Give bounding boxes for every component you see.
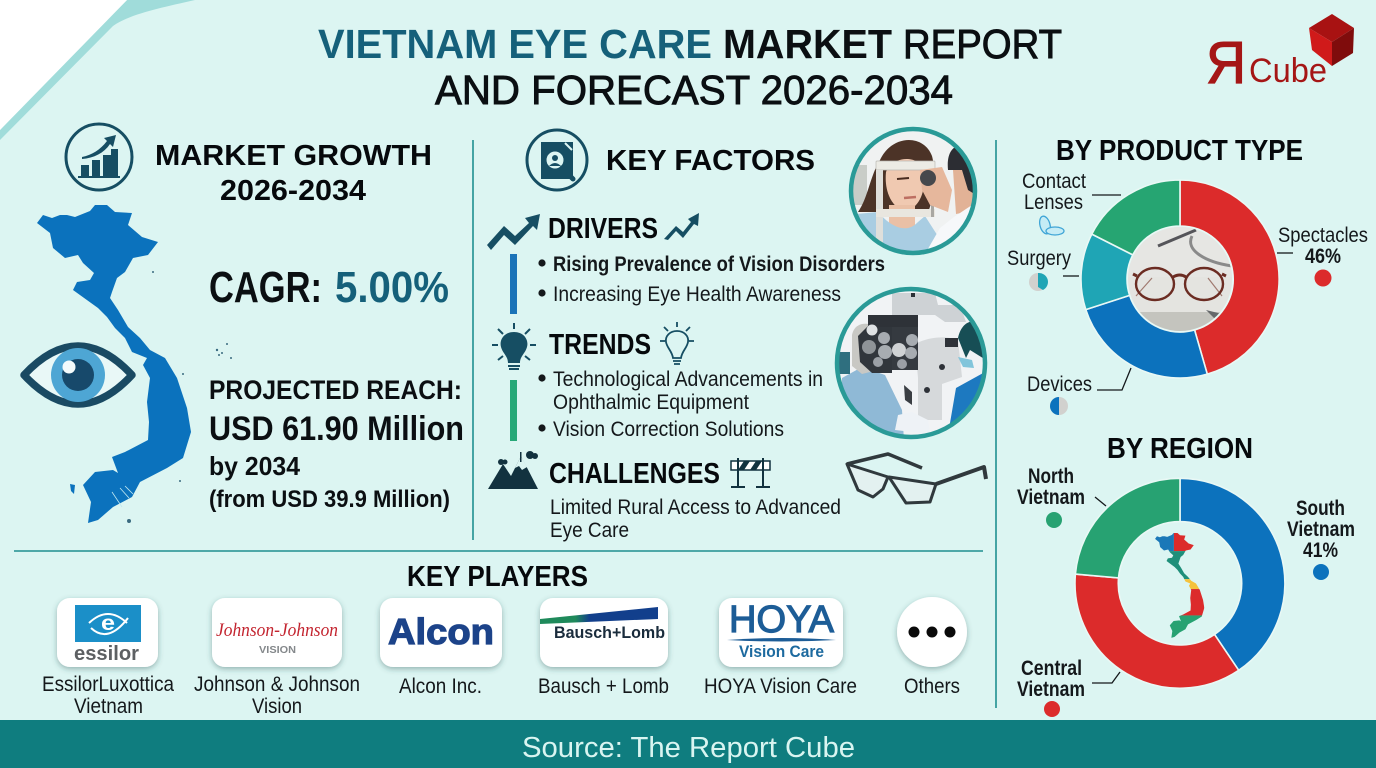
map of Vietnam — [37, 205, 232, 523]
icon: small rising arrow — [664, 213, 699, 240]
heading: market growth: 2026-2034 — [220, 175, 366, 207]
player: HOYA: Vision Care — [739, 642, 824, 661]
player: HOYA: HOYA — [729, 599, 835, 641]
title: REPORT — [903, 21, 1062, 67]
label: contact lenses: Lenses — [1024, 191, 1083, 214]
trends list: Technological Advancements in — [553, 368, 823, 391]
player: Johnson & Johnson — [194, 598, 360, 718]
challenges text — [550, 496, 841, 542]
player: Johnson & Johnson: VISION — [259, 644, 296, 656]
heading: key factors: KEY FACTORS — [606, 145, 815, 177]
player: Alcon: Alcon Inc. — [399, 675, 482, 698]
player: Johnson & Johnson: Johnson-Johnson — [216, 620, 338, 641]
icon: mountains — [488, 451, 538, 489]
CAGR — [209, 263, 449, 312]
drivers list: Increasing Eye Health Awareness — [553, 283, 841, 306]
label: central vietnam — [1017, 657, 1120, 717]
icon: barrier — [731, 458, 770, 487]
player: Alcon: Alcon — [388, 611, 494, 652]
player: others — [897, 597, 967, 698]
icon: eye — [24, 346, 132, 404]
player: Bausch + Lomb: Bausch+Lomb — [554, 623, 665, 642]
player: Bausch + Lomb — [538, 598, 669, 698]
panel: by region — [1017, 433, 1355, 717]
projected reach: USD 61.90 Million — [209, 410, 464, 448]
footer — [0, 720, 1376, 768]
label: devices — [1027, 368, 1131, 415]
icon: rising arrow — [487, 214, 540, 250]
photo: eye exam — [850, 129, 980, 258]
challenges section — [488, 451, 986, 542]
logo: RCube: Я — [1206, 30, 1246, 96]
label: contact lenses — [1022, 170, 1121, 235]
panel: key factors — [487, 129, 987, 542]
corner decoration — [0, 0, 195, 140]
label: central vietnam: Central — [1021, 657, 1082, 680]
heading: market growth: MARKET GROWTH — [155, 140, 432, 172]
drivers list — [538, 253, 885, 306]
title: VIETNAM EYE CARE — [318, 21, 712, 67]
title — [318, 21, 1062, 113]
label: south vietnam — [1287, 497, 1355, 580]
heading: trends: TRENDS — [549, 329, 651, 361]
player: others: Others — [904, 675, 960, 698]
player: Bausch + Lomb: Bausch + Lomb — [538, 675, 669, 698]
dividers — [14, 140, 996, 708]
player: EssilorLuxottica: EssilorLuxottica — [42, 673, 174, 696]
label: surgery: Surgery — [1007, 247, 1071, 270]
player: Alcon — [380, 598, 502, 698]
heading: challenges: CHALLENGES — [549, 458, 720, 490]
bar: drivers — [510, 254, 517, 314]
trends list — [538, 368, 823, 441]
title: AND FORECAST 2026-2034 — [435, 67, 953, 113]
label: central vietnam: Vietnam — [1017, 678, 1085, 701]
label: contact lenses: Contact — [1022, 170, 1086, 193]
donut chart: region — [1075, 478, 1285, 688]
projected reach: by 2034 — [209, 451, 301, 481]
drivers section — [487, 213, 885, 314]
panel: market growth — [24, 124, 464, 523]
heading: by region: BY REGION — [1107, 433, 1253, 465]
heading: drivers: DRIVERS — [548, 213, 658, 245]
player: Johnson & Johnson: Vision — [252, 695, 302, 718]
panel: by product type — [1007, 135, 1368, 415]
challenges text: Limited Rural Access to Advanced — [550, 496, 841, 519]
player: Johnson & Johnson: Johnson & Johnson — [194, 673, 360, 696]
mini map by region — [1155, 533, 1204, 638]
icon: bulb — [492, 323, 536, 370]
label: south vietnam: 41% — [1303, 539, 1338, 562]
label: north vietnam — [1017, 465, 1106, 528]
photo: spectacles — [1128, 227, 1232, 332]
CAGR: CAGR: — [209, 263, 322, 312]
label: surgery — [1007, 247, 1079, 291]
projected reach — [209, 375, 464, 513]
player: HOYA: HOYA Vision Care — [704, 675, 857, 698]
trends list: Ophthalmic Equipment — [553, 391, 749, 414]
heading: market growth — [155, 140, 432, 207]
logo: RCube: Cube — [1249, 52, 1327, 90]
icon: glasses — [847, 454, 986, 503]
donut chart: product type — [1081, 180, 1279, 378]
footer: Source: The Report Cube — [522, 732, 855, 764]
drivers list: Rising Prevalence of Vision Disorders — [553, 253, 885, 276]
player: EssilorLuxottica: e — [101, 612, 115, 635]
CAGR: 5.00% — [335, 263, 449, 312]
bar: trends — [510, 380, 517, 441]
projected reach: (from USD 39.9 Million) — [209, 486, 450, 513]
heading: key players: KEY PLAYERS — [407, 561, 588, 593]
icon: key factors — [527, 130, 587, 190]
projected reach: PROJECTED REACH: — [209, 375, 462, 405]
trends section — [492, 322, 823, 441]
player: HOYA — [704, 598, 857, 698]
panel: key players — [42, 561, 967, 718]
label: devices: Devices — [1027, 373, 1092, 396]
icon: outline bulb — [660, 322, 694, 364]
label: north vietnam: North — [1028, 465, 1074, 488]
player: EssilorLuxottica — [42, 598, 174, 718]
photo: phoropter — [835, 287, 987, 440]
label: spectacles: 46% — [1305, 245, 1341, 268]
title: MARKET — [723, 21, 892, 67]
icon: growth chart — [66, 124, 132, 190]
player: EssilorLuxottica: essilor — [74, 643, 139, 665]
heading: by product type: BY PRODUCT TYPE — [1056, 135, 1303, 167]
label: south vietnam: Vietnam — [1287, 518, 1355, 541]
label: south vietnam: South — [1296, 497, 1345, 520]
label: spectacles — [1277, 224, 1368, 286]
logo: RCube — [1206, 14, 1354, 96]
player: EssilorLuxottica: Vietnam — [74, 695, 143, 718]
trends list: Vision Correction Solutions — [553, 418, 784, 441]
label: north vietnam: Vietnam — [1017, 486, 1085, 509]
challenges text: Eye Care — [550, 519, 629, 542]
